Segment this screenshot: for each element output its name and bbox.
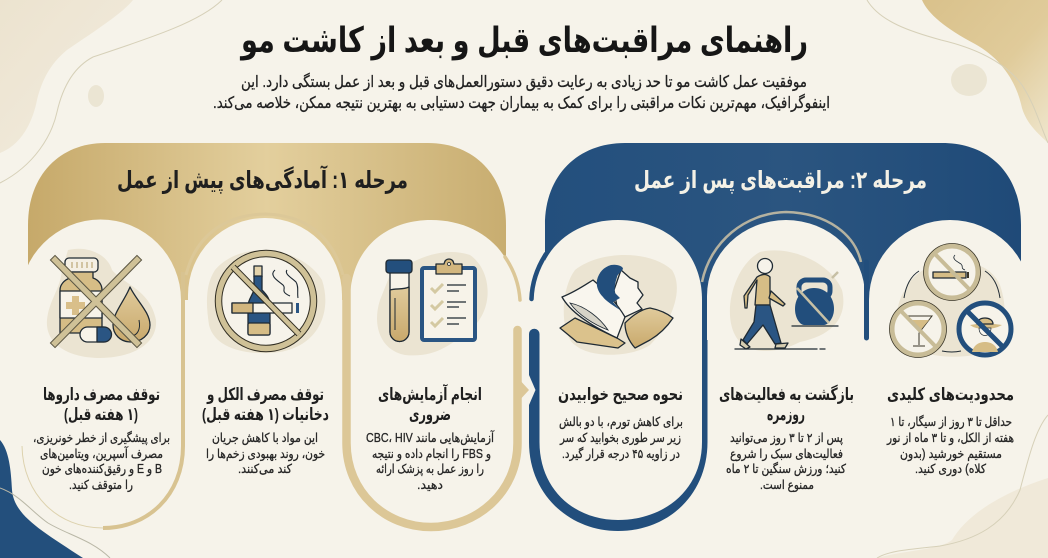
no sun exposure sign	[959, 303, 1011, 355]
card 1 body text: B و E و رقیق‌کننده‌های خون	[42, 462, 162, 477]
arrow notch in navy border	[529, 375, 536, 405]
card 4 heading: نحوه صحیح خوابیدن	[558, 385, 683, 405]
card 3 border	[346, 257, 520, 527]
stem between cards 5 and 6	[864, 262, 869, 338]
title: راهنمای مراقبت‌های قبل و بعد از کاشت مو	[239, 21, 808, 61]
card 2 heading	[202, 385, 329, 424]
arrow: gold connector to next phase	[517, 377, 529, 403]
card 3 body text: را روز عمل به پزشک ارائه	[376, 462, 484, 477]
icon: medication, blood drop crossed out	[47, 249, 156, 358]
card 4 body text: زیر سر طوری بخوابید که سر	[559, 431, 681, 446]
no alcohol sign	[890, 300, 946, 358]
panel: phase 2 post-op (navy)	[529, 143, 1031, 531]
card 2 body text: کند می‌کنند.	[238, 462, 292, 476]
background dots	[88, 64, 987, 107]
card 2 heading: توقف مصرف الکل و	[206, 385, 324, 405]
navy panel header shape	[545, 143, 1021, 300]
gold panel header shape	[28, 143, 506, 300]
card 2 body text: این مواد با کاهش جریان	[212, 431, 318, 446]
panel: phase 1 pre-op (gold)	[20, 143, 529, 528]
background blob: top left	[0, 0, 133, 153]
card 5 ring	[702, 212, 861, 282]
card 1 heading: توقف مصرف داروها	[43, 385, 160, 405]
card 1 body text: را متوقف کنید.	[69, 478, 133, 493]
card 3 body text	[366, 430, 494, 492]
card 5 body text: فعالیت‌های سبک را شروع	[730, 447, 843, 462]
card 5 body text	[726, 431, 846, 493]
card 2: stop alcohol and smoking	[186, 214, 343, 476]
background blob: bottom right	[877, 478, 1048, 558]
card 4 body text: برای کاهش تورم، با دو بالش	[559, 415, 683, 430]
card 4 body text	[559, 415, 683, 462]
card 5 heading: بازگشت به فعالیت‌های	[719, 384, 854, 404]
card 2 body text	[206, 431, 325, 476]
card 6 body text: مستقیم خورشید (بدون	[900, 447, 1002, 462]
card 6 body text: هفته از الکل، و تا ۳ ماه از نور	[886, 431, 1014, 446]
intro paragraph: اینفوگرافیک، مهم‌ترین نکات مراقبتی را برای کمک به بیماران جهت دستیابی به بهترین نتیجه ممکن، خلاصه می‌کند.	[213, 93, 830, 113]
phase 2 heading: مرحله ۲: مراقبت‌های پس از عمل	[634, 167, 927, 194]
card 5 body text: ممنوع است.	[760, 478, 814, 493]
card 2 body text: خون، روند بهبودی زخم‌ها را	[206, 447, 325, 462]
phase 1 heading: مرحله ۱: آمادگی‌های پیش از عمل	[117, 165, 408, 194]
icon: test tube and checklist	[377, 252, 488, 355]
background blob: bottom left navy	[0, 440, 83, 558]
card 1 body text: مصرف آسپرین، ویتامین‌های	[40, 446, 163, 462]
intro paragraph	[213, 72, 830, 113]
card 1 body text	[33, 430, 170, 493]
card 1: stop medication	[20, 220, 183, 528]
icon: no alcohol and no smoking	[207, 250, 325, 353]
card 3 heading: انجام آزمایش‌های	[378, 383, 482, 404]
card 4 body text: در زاویه ۴۵ درجه قرار گیرد.	[562, 446, 680, 462]
card 1 border	[22, 272, 183, 528]
icon: no smoking, no alcohol, no sun exposure	[890, 244, 1011, 358]
card 4 border	[529, 254, 708, 531]
card 1 body text: برای پیشگیری از خطر خونریزی،	[33, 430, 170, 446]
card 3 body text: دهید.	[417, 478, 443, 492]
intro paragraph: موفقیت عمل کاشت مو تا حد زیادی به رعایت دقیق دستورالعمل‌های قبل و بعد از عمل بستگی دارد. این	[241, 72, 807, 92]
card 3 heading	[378, 383, 482, 425]
card 5: returning to activities	[702, 212, 866, 493]
icon: walking person and crossed kettlebell	[730, 250, 843, 351]
card 1 heading: (۱ هفته قبل)	[64, 405, 138, 424]
card 1 heading	[43, 385, 160, 424]
card 5 heading	[719, 384, 854, 425]
card 4: sleeping position	[529, 220, 708, 531]
background blob: top right gold	[922, 0, 1048, 143]
card 6 body text: کلاه) دوری کنید.	[915, 462, 986, 477]
card 6 body text: حداقل تا ۳ روز از سیگار، تا ۱	[890, 414, 1012, 430]
card 2 ring	[186, 214, 343, 275]
card 5 body text: کنید؛ ورزش سنگین تا ۲ ماه	[726, 461, 846, 477]
card 5 heading: روزمره	[767, 405, 805, 425]
card 5 body text: پس از ۲ تا ۳ روز می‌توانید	[730, 431, 843, 446]
card 3 body text: و FBS را انجام داده و نتیجه	[372, 447, 491, 462]
card 3: required tests	[346, 220, 529, 527]
card 3 body text: آزمایش‌هایی مانند CBC، HIV	[366, 430, 494, 446]
card 3 heading: ضروری	[409, 405, 451, 425]
no smoking sign	[924, 244, 980, 300]
card 6: key restrictions	[869, 220, 1031, 477]
card 6 heading: محدودیت‌های کلیدی	[887, 385, 1014, 405]
card 2 heading: دخانیات (۱ هفته قبل)	[202, 405, 329, 424]
card 6 body text	[886, 414, 1014, 477]
icon: sleeping on raised pillows	[560, 255, 677, 355]
